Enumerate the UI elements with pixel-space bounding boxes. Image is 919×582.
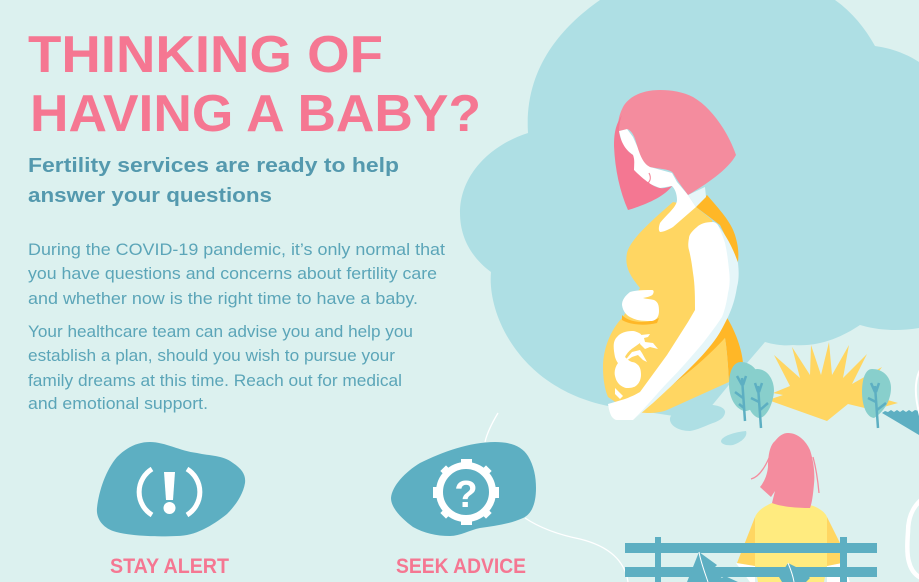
dress bbox=[603, 202, 729, 413]
title: THINKING OF bbox=[28, 26, 383, 84]
intro paragraph: you have questions and concerns about fertility care bbox=[28, 264, 437, 283]
bench bbox=[625, 537, 877, 582]
support paragraph: family dreams at this time. Reach out for medical bbox=[28, 371, 402, 390]
hand on belly bbox=[622, 290, 659, 321]
subtitle bbox=[28, 154, 399, 207]
intro paragraph: and whether now is the right time to have a baby. bbox=[28, 289, 418, 308]
tree 2 bbox=[746, 369, 774, 428]
ponds bbox=[670, 405, 746, 445]
support paragraph: establish a plan, should you wish to pursue your bbox=[28, 346, 395, 365]
icon: seek advice bbox=[391, 442, 536, 536]
support paragraph bbox=[28, 322, 413, 413]
decorative white lines bbox=[485, 370, 919, 582]
icon: seek advice: ? bbox=[454, 474, 478, 516]
hand shadow bbox=[622, 315, 659, 325]
subtitle: answer your questions bbox=[28, 184, 272, 207]
woman illustration bbox=[603, 90, 743, 420]
label: seek advice: SEEK ADVICE bbox=[396, 555, 526, 578]
eyelash bbox=[648, 173, 650, 183]
subtitle: Fertility services are ready to help bbox=[28, 154, 399, 177]
hair strands bbox=[751, 457, 819, 493]
dress lower shadow bbox=[672, 316, 743, 385]
title: HAVING A BABY? bbox=[30, 85, 481, 143]
hair light bbox=[618, 90, 736, 195]
support paragraph: and emotional support. bbox=[28, 394, 208, 413]
label: stay alert: STAY ALERT bbox=[110, 555, 229, 578]
trees bbox=[729, 362, 891, 428]
tree 1 bbox=[729, 362, 762, 421]
arm bbox=[608, 222, 730, 420]
icon: stay alert bbox=[97, 442, 245, 536]
sleeve highlight bbox=[633, 223, 739, 420]
shirt bbox=[755, 503, 827, 582]
teal hill bbox=[882, 410, 919, 435]
dress back upper shadow bbox=[696, 195, 738, 262]
arms bbox=[736, 563, 850, 582]
title bbox=[28, 26, 481, 143]
thought cloud bbox=[460, 0, 919, 420]
intro paragraph: During the COVID-19 pandemic, it’s only normal that bbox=[28, 240, 445, 259]
fetus bbox=[614, 331, 658, 399]
neck and face bbox=[619, 129, 696, 232]
person on bench bbox=[736, 433, 850, 582]
hair bbox=[760, 433, 814, 508]
hair dark bbox=[614, 115, 672, 210]
tree 3 bbox=[862, 369, 891, 428]
intro paragraph bbox=[28, 240, 445, 308]
leaves bbox=[687, 552, 810, 582]
sleeves bbox=[737, 517, 842, 566]
sun bbox=[768, 342, 898, 421]
support paragraph: Your healthcare team can advise you and help you bbox=[28, 322, 413, 341]
neck highlight bbox=[688, 187, 706, 207]
